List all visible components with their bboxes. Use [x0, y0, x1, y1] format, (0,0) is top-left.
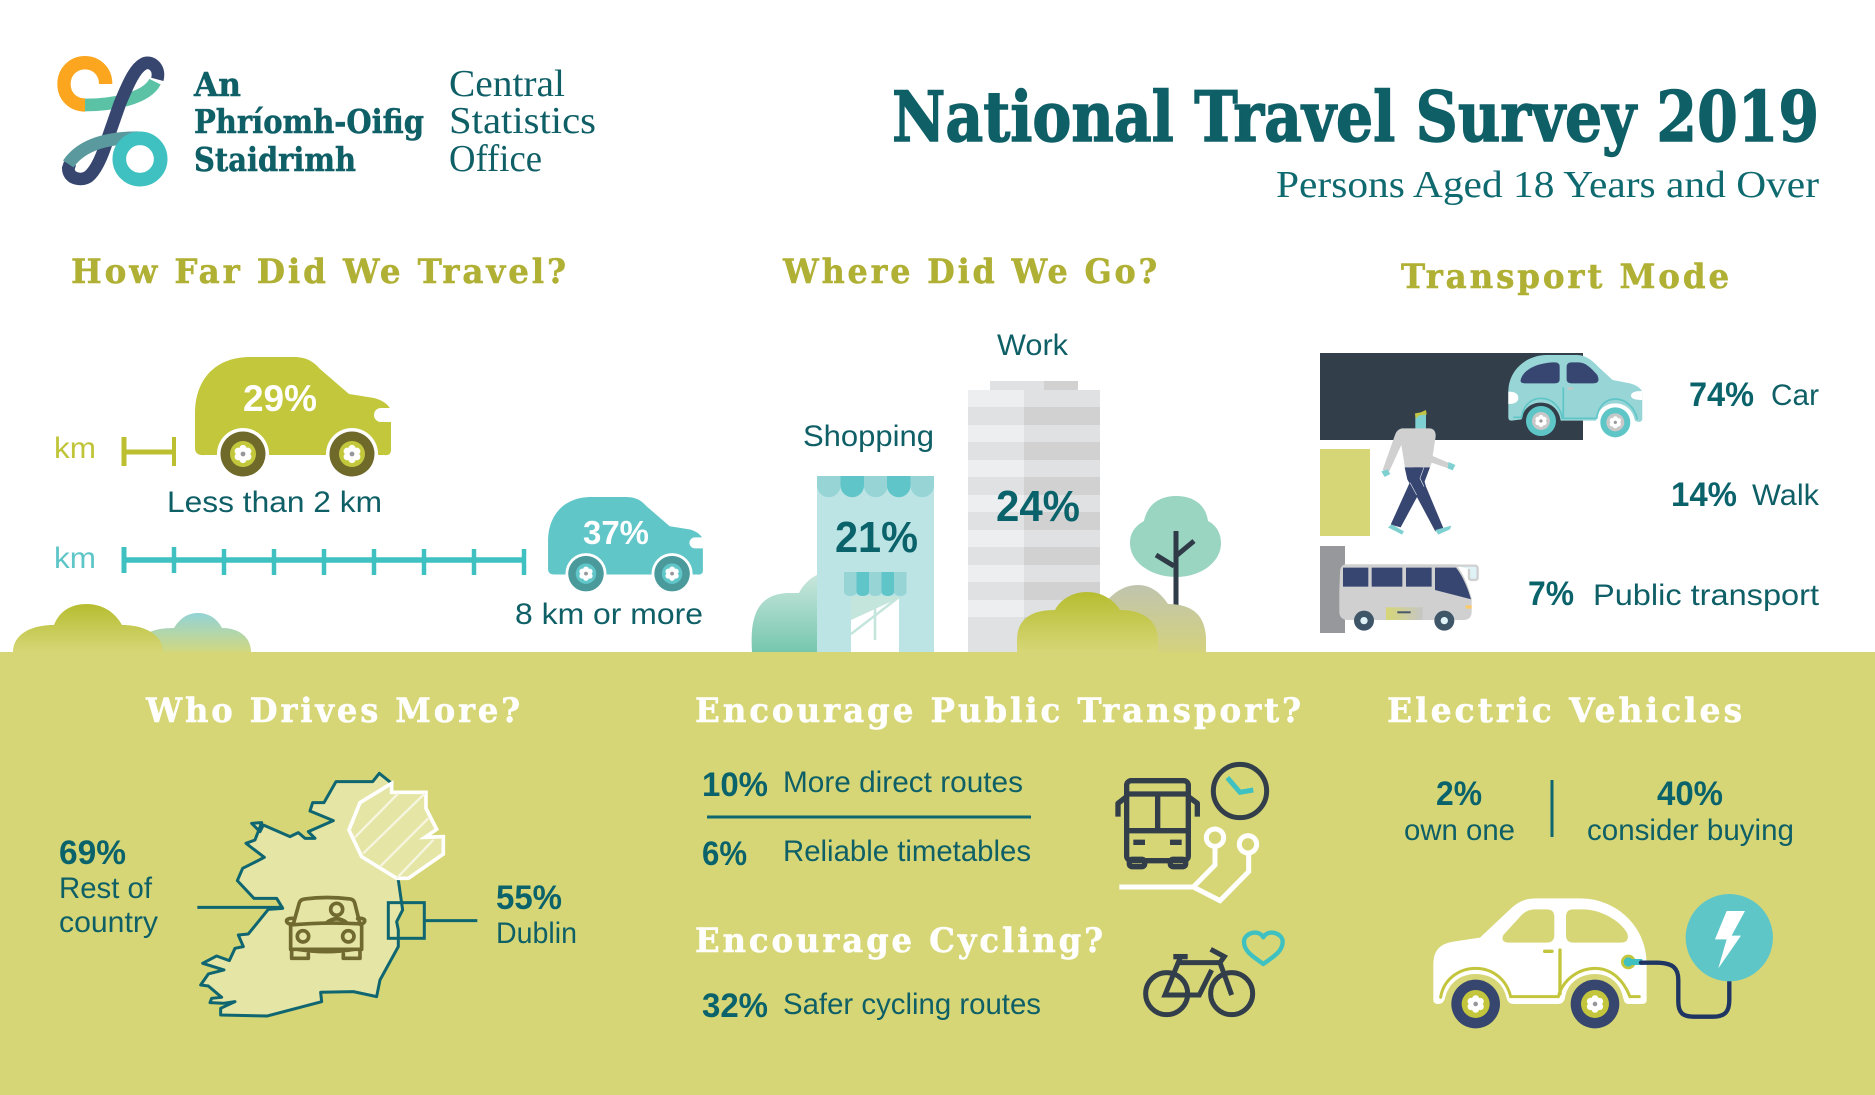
icon: shop 21%: 21% [835, 513, 918, 562]
stat: safer cycling routes 32% [702, 987, 1041, 1025]
heading: who drives more: Who Drives More? [145, 691, 523, 731]
icon: bus [1339, 564, 1478, 631]
heading: encourage public transport: Encourage Public Transport? [695, 691, 1304, 731]
km label olive: km [54, 432, 96, 465]
icon: office tower 24% [968, 381, 1100, 652]
stat: more direct routes 10%: More direct routes [783, 766, 1023, 799]
stat: own one 2%: own one [1404, 814, 1515, 847]
stat: dublin 55%: Dublin [496, 917, 577, 950]
stat: rest of country 69%: 69% [59, 834, 126, 872]
km label teal: km [54, 542, 96, 575]
stat: rest of country 69% [59, 834, 158, 939]
heading: encourage cycling: Encourage Cycling? [695, 921, 1106, 961]
bush behind shop [752, 575, 817, 652]
label: shopping: Shopping [803, 420, 934, 453]
icon: electric car charging [1433, 894, 1773, 1028]
stat: reliable timetables 6%: Reliable timetables [783, 835, 1031, 868]
stat: more direct routes 10% [702, 766, 1023, 804]
icon: olive car 29% [195, 357, 398, 480]
logo: Central Statistics Office [64, 63, 596, 180]
stat: car 74%: Car [1771, 379, 1819, 412]
icon: teal car 37%: 37% [583, 514, 649, 551]
stat: reliable timetables 6%: 6% [702, 835, 747, 873]
bar: car [1320, 353, 1583, 440]
stat: walk 14%: Walk [1752, 479, 1820, 512]
panel: encourage public transport [695, 691, 1304, 1025]
icon: clock [1213, 764, 1267, 818]
heading: electric vehicles: Electric Vehicles [1387, 691, 1745, 731]
stat: public transport 7%: Public transport [1593, 579, 1820, 612]
stat: consider buying 40%: consider buying [1587, 814, 1794, 847]
ruler: 8 km [124, 547, 524, 575]
logo Irish name: An [193, 65, 241, 104]
panel: who drives more [59, 691, 577, 1016]
heading: how far: How Far Did We Travel? [71, 252, 569, 292]
map: ireland [197, 773, 477, 1016]
panel: how far did we travel [13, 252, 708, 652]
panel: transport mode [1320, 257, 1820, 633]
label: work: Work [997, 329, 1069, 362]
icon: olive car 29%: 29% [243, 378, 317, 419]
icon: tree [1130, 496, 1221, 606]
icon: office tower 24%: 24% [996, 482, 1080, 531]
logo Irish name [193, 65, 424, 179]
logo Irish name: Phríomh-Oifig [194, 102, 424, 141]
heading: where: Where Did We Go? [782, 252, 1160, 292]
subtitle: Persons Aged 18 Years and Over [1276, 164, 1819, 206]
logo Irish name: Staidrimh [194, 140, 356, 179]
icon: shop 21% [817, 476, 934, 652]
panel: electric vehicles [1387, 691, 1794, 1028]
icon: route [1119, 829, 1257, 901]
panel: lower green band [0, 652, 1875, 1095]
panel: where did we go [752, 252, 1221, 652]
stat: safer cycling routes 32%: Safer cycling routes [783, 988, 1041, 1021]
icon: bus front [1118, 781, 1197, 867]
logo English name: Central [449, 63, 565, 105]
stat: car 74% [1689, 376, 1819, 414]
bushes centre [1017, 585, 1206, 652]
heading: transport mode: Transport Mode [1401, 257, 1732, 297]
stat: public transport 7%: 7% [1528, 575, 1574, 613]
icon: logo knot [64, 63, 161, 180]
stat: own one 2% [1404, 775, 1515, 847]
stat: reliable timetables 6% [702, 835, 1031, 873]
icon: heart [1244, 933, 1283, 964]
ruler: 2 km [124, 437, 174, 466]
stat: more direct routes 10%: 10% [702, 766, 768, 804]
stat: dublin 55% [496, 879, 577, 950]
stat: own one 2%: 2% [1436, 775, 1482, 813]
stat: dublin 55%: 55% [496, 879, 562, 917]
bar: public transport [1320, 546, 1345, 633]
stat: walk 14%: 14% [1671, 476, 1737, 514]
icon: teal car [1508, 355, 1642, 437]
logo English name [449, 63, 596, 180]
bar: walk [1320, 449, 1370, 536]
stat: walk 14% [1671, 476, 1820, 514]
logo English name: Statistics [449, 100, 596, 142]
stat: rest of country 69%: Rest of [59, 872, 153, 905]
icon: bicycle [1146, 949, 1253, 1015]
stat: consider buying 40%: 40% [1657, 775, 1723, 813]
icon: walking person [1381, 410, 1455, 535]
stat: car 74%: 74% [1689, 376, 1754, 414]
icon: teal car 37% [548, 497, 708, 594]
stat: consider buying 40% [1587, 775, 1794, 847]
bushes left [13, 604, 251, 652]
label: 8 km or more: 8 km or more [515, 598, 703, 631]
logo English name: Office [449, 138, 542, 180]
stat: rest of country 69%: country [59, 906, 158, 939]
icon: car with driver [287, 897, 365, 958]
stat: safer cycling routes 32%: 32% [702, 987, 768, 1025]
label: less than 2 km: Less than 2 km [167, 486, 382, 519]
stat: public transport 7% [1528, 575, 1820, 613]
